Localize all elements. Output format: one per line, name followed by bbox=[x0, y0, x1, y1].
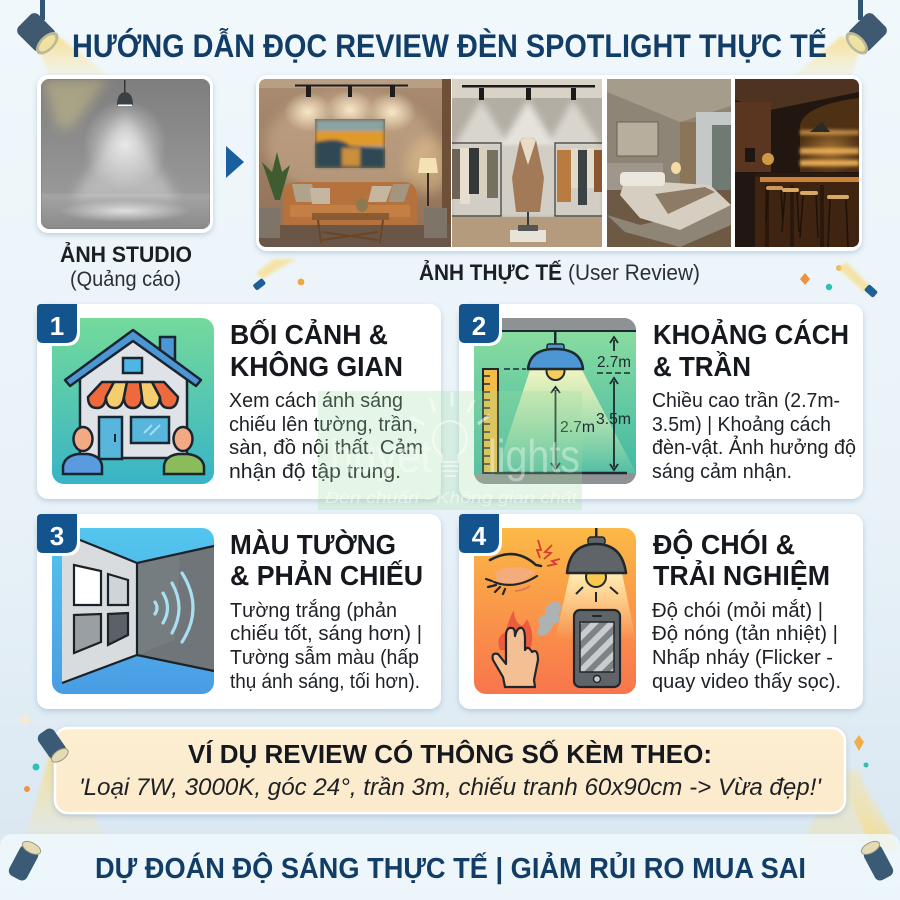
callout: review example bbox=[55, 728, 845, 813]
body text 4: quay video thấy sọc). bbox=[652, 671, 841, 693]
icon: room with walls bbox=[52, 528, 214, 694]
photo: boutique bbox=[452, 79, 604, 247]
icon: glare, heat, flicker bbox=[474, 528, 636, 694]
badge 4: 4 bbox=[472, 521, 487, 551]
body text 4: Độ chói (mỏi mắt) | bbox=[652, 599, 823, 622]
caption: studio: (Quảng cáo) bbox=[70, 268, 181, 291]
diagram: ceiling and distances bbox=[474, 318, 636, 484]
icon: house bbox=[52, 318, 214, 484]
heading 2: KHOẢNG CÁCH bbox=[653, 318, 849, 350]
heading 4: TRẢI NGHIỆM bbox=[653, 559, 830, 591]
arrow bbox=[226, 146, 244, 178]
body text 1: nhận độ tập trung. bbox=[229, 461, 401, 483]
body text 3: Tường sẫm màu (hấp bbox=[230, 646, 419, 669]
watermark bbox=[318, 391, 582, 510]
decoration: sparkles upper bbox=[298, 265, 842, 290]
caption: studio bbox=[60, 242, 192, 291]
body text 1: chiếu lên tường, trần, bbox=[229, 414, 418, 436]
icon: spotlight callout left bbox=[35, 726, 71, 765]
body text 1: sàn, đồ nội thất. Cảm bbox=[229, 437, 423, 459]
photo: bar bbox=[735, 79, 862, 247]
icon: spotlight bottom left bbox=[7, 839, 43, 883]
icon: spotlight bottom right bbox=[859, 839, 895, 883]
panel 4: glare and experience bbox=[459, 514, 863, 709]
panel 1: context and space bbox=[37, 304, 441, 499]
body text 2: 3.5m) | Khoảng cách bbox=[652, 414, 831, 436]
heading 2 bbox=[653, 318, 849, 382]
diagram: ceiling and distances: 3.5m bbox=[596, 411, 631, 428]
heading 1 bbox=[230, 318, 403, 382]
body text 4 bbox=[652, 599, 841, 693]
panel: real photos bbox=[256, 75, 862, 251]
body text 4: Độ nóng (tản nhiệt) | bbox=[652, 623, 838, 645]
caption: real photos: ẢNH THỰC TẾ bbox=[419, 260, 562, 285]
icon: pendant lamp bbox=[117, 80, 133, 106]
watermark: huyet bbox=[330, 430, 432, 482]
footer band: DỰ ĐOÁN ĐỘ SÁNG THỰC TẾ | GIẢM RỦI RO MUA SAI bbox=[95, 851, 806, 885]
title: HƯỚNG DẪN ĐỌC REVIEW ĐÈN SPOTLIGHT THỰC TẾ bbox=[72, 28, 827, 64]
badge 3: 3 bbox=[50, 521, 64, 551]
heading 1: KHÔNG GIAN bbox=[230, 350, 403, 382]
badge 3 bbox=[37, 514, 80, 556]
badge 2: 2 bbox=[472, 311, 486, 341]
icon: spotlight top right bbox=[842, 0, 889, 58]
heading 4 bbox=[653, 528, 830, 591]
heading 2: & TRẦN bbox=[653, 351, 751, 382]
photo: bedroom bbox=[607, 79, 731, 247]
caption: studio: ẢNH STUDIO bbox=[60, 242, 192, 267]
body text 3 bbox=[230, 599, 422, 693]
diagram: ceiling and distances: 2.7m bbox=[560, 419, 595, 436]
body text 3: Tường trắng (phản bbox=[230, 599, 397, 622]
body text 1: Xem cách ánh sáng bbox=[229, 390, 403, 412]
body text 3: thụ ánh sáng, tối hơn). bbox=[230, 671, 420, 693]
heading 1: BỐI CẢNH & bbox=[230, 318, 388, 350]
body text 3: chiếu tốt, sáng hơn) | bbox=[230, 623, 422, 645]
icon: small spotlight right bbox=[838, 262, 878, 298]
watermark: lights bbox=[488, 430, 580, 482]
watermark: Đèn chuẩn - Không gian chất bbox=[325, 489, 578, 507]
body text 1 bbox=[229, 390, 423, 483]
callout: review example: 'Loại 7W, 3000K, góc 24°, trần 3m, chiếu tranh 60x90cm -> Vừa đẹp!' bbox=[79, 774, 822, 801]
badge 4 bbox=[459, 514, 502, 556]
icon: spotlight top left bbox=[15, 0, 62, 58]
diagram: ceiling and distances: 2.7m bbox=[597, 354, 631, 371]
photo: living room bbox=[259, 79, 451, 247]
caption: real photos: (User Review) bbox=[568, 260, 700, 285]
body text 2: đèn-vật. Ảnh hưởng độ bbox=[652, 436, 856, 459]
heading 4: ĐỘ CHÓI & bbox=[653, 528, 795, 560]
body text 2: sáng cảm nhận. bbox=[652, 461, 792, 483]
icon: small spotlight left bbox=[252, 259, 296, 291]
badge 1: 1 bbox=[50, 311, 64, 341]
badge 1 bbox=[37, 304, 80, 346]
heading 3: MÀU TƯỜNG bbox=[230, 529, 396, 560]
footer band bbox=[0, 834, 900, 900]
panel 3: wall colour and reflection bbox=[37, 514, 441, 709]
body text 2: Chiều cao trần (2.7m- bbox=[652, 390, 840, 412]
decoration: sparkles lower bbox=[17, 713, 868, 792]
panel: studio photo bbox=[37, 75, 213, 233]
badge 2 bbox=[459, 304, 502, 346]
caption: real photos bbox=[419, 260, 700, 285]
callout: review example: VÍ DỤ REVIEW CÓ THÔNG SỐ KÈM THEO: bbox=[188, 739, 712, 769]
panel 2: distance and ceiling bbox=[459, 304, 863, 499]
heading 3 bbox=[230, 529, 423, 591]
body text 2 bbox=[652, 390, 856, 483]
body text 4: Nhấp nháy (Flicker - bbox=[652, 647, 833, 669]
heading 3: & PHẢN CHIẾU bbox=[230, 559, 423, 591]
